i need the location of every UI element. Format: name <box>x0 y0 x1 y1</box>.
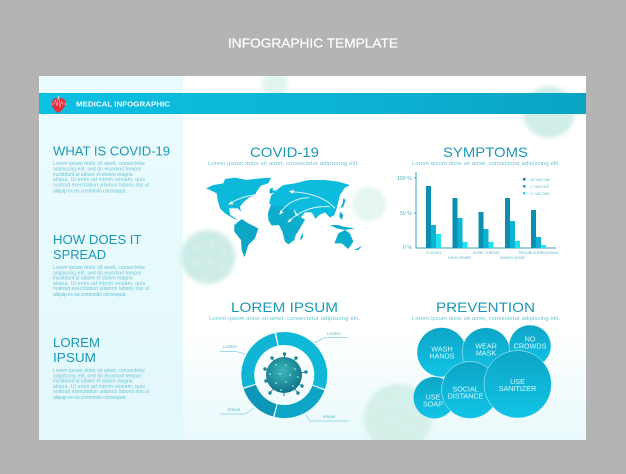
axis <box>414 172 556 248</box>
text block: what is covid <box>53 144 170 194</box>
text block: lorem ipsum left: Lorem ipsum dolor sit amet, consectetur <box>53 368 145 374</box>
bubble: use sanitizer: USE <box>510 377 525 386</box>
category labels: HIGH FEVER <box>448 256 471 260</box>
bubble: wash hands: WASH <box>431 344 453 354</box>
bubble: use sanitizer <box>484 351 551 418</box>
donut chart: IPSUM <box>228 408 240 412</box>
donut chart: LOREM <box>223 345 237 349</box>
legend <box>523 178 551 196</box>
text block: lorem ipsum left: LOREM <box>53 336 100 350</box>
axis labels: 0 % <box>403 245 412 251</box>
category labels: TROUBLE BREATHING <box>518 251 559 255</box>
bubble: social distance <box>442 362 498 418</box>
icon: virus <box>264 353 307 396</box>
header band <box>39 93 586 114</box>
bubble: use soap: USE <box>426 392 441 402</box>
bubble: use sanitizer: SANITIZER <box>499 384 536 393</box>
axis labels: 100 % <box>397 176 412 182</box>
category labels: SORE THROAT <box>473 251 501 255</box>
donut chart: LOREM <box>327 332 341 336</box>
text block: what is covid: incididunt ut labore et dolore magna <box>53 172 133 178</box>
category labels: RUNNY NOSE <box>500 256 525 260</box>
text block: how does it spread: aliqua. Ut enim ad minim veniam, quis <box>53 281 146 287</box>
heading: lorem ipsum <box>209 299 360 322</box>
bubble: use soap <box>413 377 455 419</box>
heading: symptoms <box>412 144 560 167</box>
legend: NO VACCINE <box>530 178 551 182</box>
text block: lorem ipsum left: incididunt ut labore et dolore magna <box>53 379 133 385</box>
donut chart: IPSUM <box>323 415 335 419</box>
category labels: COUGH <box>426 251 441 255</box>
heading: lorem ipsum: LOREM IPSUM <box>231 299 338 315</box>
text block: what is covid: WHAT IS COVID-19 <box>53 144 170 158</box>
bubble: social distance: DISTANCE <box>448 392 484 400</box>
page title: INFOGRAPHIC TEMPLATE <box>228 36 398 50</box>
text block: lorem ipsum left <box>53 336 150 401</box>
text block: what is covid: nostrud exercitation ullamco laboris nisi ut <box>53 182 150 188</box>
americas <box>206 178 276 257</box>
text block: what is covid: adipiscing elit, sed do eiusmod tempor <box>53 166 142 172</box>
text block: how does it spread: incididunt ut labore et dolore magna <box>53 276 133 282</box>
world map <box>206 178 362 257</box>
heading: covid-19: COVID-19 <box>250 144 319 160</box>
heading: prevention <box>412 299 560 322</box>
icon: heart <box>51 96 67 113</box>
bubble: use soap: SOAP <box>423 400 443 408</box>
text block: how does it spread <box>53 233 150 298</box>
bubble: no crowds: NO <box>525 334 536 344</box>
text block: lorem ipsum left: adipiscing elit, sed do eiusmod tempor <box>53 373 142 379</box>
legend: 2ⁿᵈ VACCINE <box>530 192 550 196</box>
text block: how does it spread: adipiscing elit, sed do eiusmod tempor <box>53 270 142 276</box>
text block: what is covid: Lorem ipsum dolor sit amet, consectetur <box>53 161 145 167</box>
band label: MEDICAL INFOGRAPHIC <box>76 100 171 108</box>
legend: 1ˢᵗ VACCINE <box>530 185 550 189</box>
bubble: wear mask: MASK <box>476 348 496 358</box>
bubble: wear mask <box>462 328 510 376</box>
bar chart: symptoms <box>397 172 559 260</box>
text block: what is covid: aliquip ex ea commodo consequat. <box>53 188 126 194</box>
heading: covid-19: Lorem ipsum dolor sit amet, consectetur adipiscing elit. <box>208 161 359 167</box>
donut callouts <box>220 338 348 421</box>
afro-eurasia and oceania <box>228 180 362 250</box>
heading: symptoms: Lorem ipsum dolor sit amet, consectetur adipiscing elit. <box>412 161 560 167</box>
bubble: no crowds <box>509 325 551 367</box>
heading: symptoms: SYMPTOMS <box>443 144 528 160</box>
text block: lorem ipsum left: aliquip ex ea commodo consequat. <box>53 395 126 401</box>
text block: how does it spread: Lorem ipsum dolor sit amet, consectetur <box>53 265 145 271</box>
bubbles: prevention <box>413 325 551 419</box>
heading: covid-19 <box>208 144 359 167</box>
donut chart <box>220 328 348 422</box>
text block: how does it spread: aliquip ex ea commodo consequat. <box>53 292 126 298</box>
bubble: no crowds: CROWDS <box>514 342 547 350</box>
panel: main sheet <box>39 76 586 440</box>
blurred virus backgrounds <box>181 71 575 452</box>
text block: how does it spread: HOW DOES IT <box>53 233 142 247</box>
text block: lorem ipsum left: nostrud exercitation ullamco laboris nisi ut <box>53 389 150 395</box>
axis labels: 50 % <box>400 211 412 217</box>
text block: how does it spread: nostrud exercitation ullamco laboris nisi ut <box>53 286 150 292</box>
bubble: social distance: SOCIAL <box>452 384 479 394</box>
arrows: spread routes <box>230 192 335 221</box>
text block: lorem ipsum left: aliqua. Ut enim ad minim veniam, quis <box>53 384 146 390</box>
bars <box>426 186 536 248</box>
bubble: wash hands: HANDS <box>429 352 455 360</box>
text block: what is covid: aliqua. Ut enim ad minim veniam, quis <box>53 177 146 183</box>
heading: lorem ipsum: Lorem ipsum dolor sit amet, consectetur adipiscing elit. <box>209 316 360 322</box>
text block: lorem ipsum left: IPSUM <box>53 351 96 365</box>
axis labels <box>397 176 412 251</box>
category labels <box>426 251 559 260</box>
heading: prevention: Lorem ipsum dolor sit amet, consectetur adipiscing elit. <box>412 316 560 322</box>
bubble: wash hands <box>417 328 466 377</box>
bubble: wear mask: WEAR <box>475 342 497 350</box>
text block: how does it spread: SPREAD <box>53 248 106 262</box>
heading: prevention: PREVENTION <box>436 299 535 315</box>
